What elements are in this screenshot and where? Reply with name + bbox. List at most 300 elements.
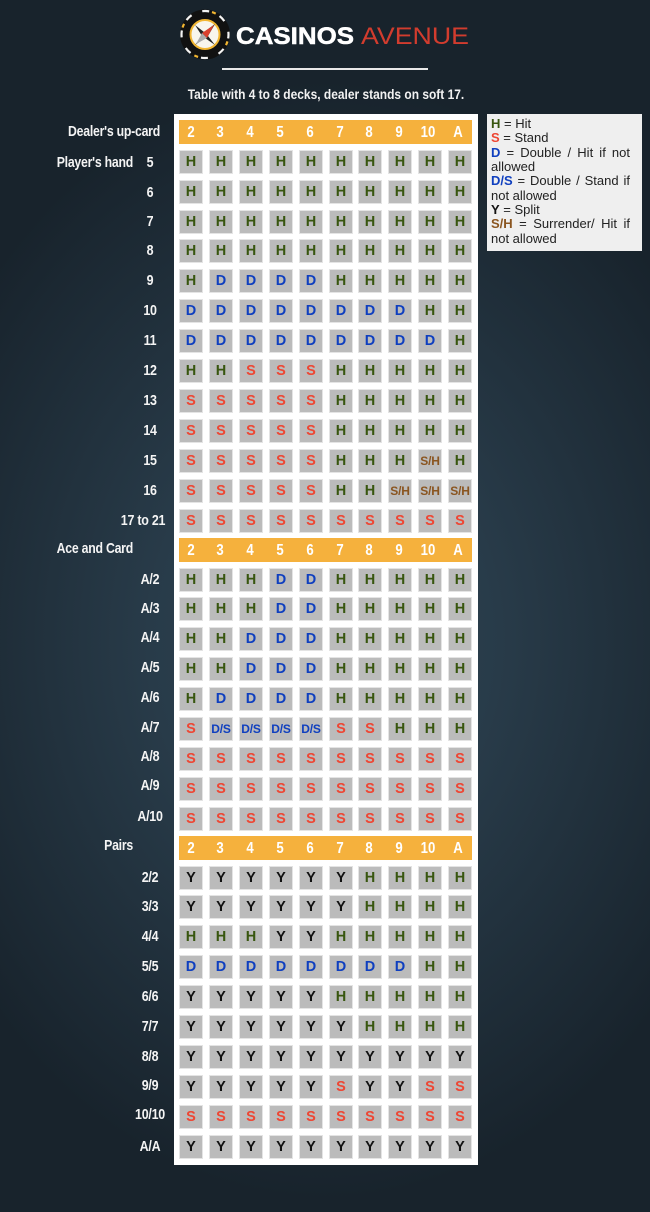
row: A/9: S	[186, 781, 196, 797]
row: 6: H	[395, 184, 405, 200]
row: 5/5: D	[216, 959, 226, 975]
row: 14: H	[455, 423, 465, 439]
row: A/6: H	[455, 691, 465, 707]
row: 10: H	[425, 303, 435, 319]
row: 14: S	[186, 423, 196, 439]
row: 7: H	[276, 214, 286, 230]
row: 7/7: H	[455, 1019, 465, 1035]
row: A/5: H	[365, 661, 375, 677]
row: A/3: H	[216, 601, 226, 617]
row: A/A: Y	[395, 1139, 405, 1155]
row: 6: H	[306, 184, 316, 200]
row: 5: H	[365, 154, 375, 170]
row: 16: 16	[143, 482, 157, 499]
row: 9: D	[276, 273, 286, 289]
row: 8: H	[216, 243, 226, 259]
row: 7/7: H	[365, 1019, 375, 1035]
row: 7/7: Y	[186, 1019, 196, 1035]
row: A/3: H	[425, 601, 435, 617]
row: 10: D	[365, 303, 375, 319]
row: 3/3: Y	[276, 899, 286, 915]
row: 11: D	[276, 333, 286, 349]
row: 9: H	[455, 273, 465, 289]
row: 5: H	[306, 154, 316, 170]
legend panel	[487, 114, 642, 251]
row: 4/4: H	[336, 929, 346, 945]
row: 8: H	[336, 243, 346, 259]
row: 16	[143, 479, 472, 503]
header row: pairs: 10	[421, 840, 435, 857]
row: 9/9: Y	[365, 1079, 375, 1095]
row: 17 to 21: S	[306, 513, 316, 529]
row: 5: H	[395, 154, 405, 170]
row: 5/5: D	[395, 959, 405, 975]
header row: ace and card: 5	[276, 542, 284, 559]
row: A/9: S	[216, 781, 226, 797]
heading: player's hand: Player's hand	[57, 154, 133, 171]
row: A/9: S	[336, 781, 346, 797]
header row: dealer cards: 8	[365, 124, 373, 141]
row: 10/10: S	[306, 1109, 316, 1125]
row: A/4: H	[336, 631, 346, 647]
row: 7: 7	[147, 213, 153, 230]
row: 7: H	[365, 214, 375, 230]
row: 12: H	[186, 363, 196, 379]
row: A/8: S	[455, 751, 465, 767]
row: 15: S/H	[420, 454, 440, 468]
row: 15: H	[395, 453, 405, 469]
header row: pairs: 8	[365, 840, 373, 857]
row: A/10: S	[455, 811, 465, 827]
row: 6/6: H	[425, 989, 435, 1005]
row: 9: H	[395, 273, 405, 289]
row: 16: H	[336, 483, 346, 499]
row: 12: H	[216, 363, 226, 379]
row: A/5	[140, 657, 472, 681]
row: A/10: S	[365, 811, 375, 827]
row: 5: H	[276, 154, 286, 170]
row: A/4: H	[365, 631, 375, 647]
header row: ace and card: 2	[187, 542, 195, 559]
header row: dealer cards: A	[453, 124, 463, 141]
row: 12: S	[246, 363, 256, 379]
row: 17 to 21: S	[336, 513, 346, 529]
row: 12	[143, 359, 472, 383]
row: 10: D	[395, 303, 405, 319]
header row: pairs: 2	[187, 840, 195, 857]
row: 2/2: H	[455, 870, 465, 886]
row: A/4: A/4	[141, 629, 159, 646]
row: 5	[147, 150, 472, 174]
logo	[180, 10, 469, 60]
row: 6: H	[186, 184, 196, 200]
row: A/6: A/6	[141, 689, 159, 706]
row: 8/8: Y	[246, 1049, 256, 1065]
row: 5: H	[186, 154, 196, 170]
row: 14: 14	[143, 422, 157, 439]
row: A/6: D	[306, 691, 316, 707]
row: 8: H	[395, 243, 405, 259]
row: 17 to 21: S	[425, 513, 435, 529]
row: A/10: S	[425, 811, 435, 827]
row: 17 to 21: S	[186, 513, 196, 529]
row: 15	[143, 449, 472, 473]
header row: dealer cards: 5	[276, 124, 284, 141]
row: 7/7: Y	[336, 1019, 346, 1035]
row: 11: D	[186, 333, 196, 349]
row: 4/4	[142, 925, 472, 949]
row: 6: H	[276, 184, 286, 200]
row: 10/10: S	[425, 1109, 435, 1125]
subtitle: Table with 4 to 8 decks, dealer stands on soft 17.	[188, 86, 464, 102]
row: 6/6: Y	[186, 989, 196, 1005]
row: 11: D	[306, 333, 316, 349]
header row: pairs: 3	[216, 840, 224, 857]
row: A/10: A/10	[137, 808, 163, 825]
row: A/8: S	[425, 751, 435, 767]
row: A/10: S	[186, 811, 196, 827]
row: 4/4: H	[216, 929, 226, 945]
row: 11: D	[216, 333, 226, 349]
row: 7/7: 7/7	[142, 1018, 158, 1035]
row: A/10: S	[306, 811, 316, 827]
row: 10/10: S	[365, 1109, 375, 1125]
row: A/3: A/3	[141, 600, 159, 617]
row: A/5: H	[216, 661, 226, 677]
row: A/7: S	[186, 721, 196, 737]
row: 13: 13	[143, 392, 157, 409]
row: 11: D	[425, 333, 435, 349]
row: A/4: H	[186, 631, 196, 647]
row: A/4: D	[246, 631, 256, 647]
row: 16: S/H	[420, 484, 440, 498]
row: A/5: H	[186, 661, 196, 677]
row: A/3: H	[186, 601, 196, 617]
row: 10: D	[306, 303, 316, 319]
row: A/A: Y	[216, 1139, 226, 1155]
row: A/5: H	[336, 661, 346, 677]
header row: dealer cards: 6	[306, 124, 314, 141]
row: A/2	[140, 568, 472, 592]
row: A/7: D/S	[301, 722, 321, 736]
row: A/5: H	[425, 661, 435, 677]
wordmark	[236, 23, 469, 50]
row: 2/2	[142, 866, 472, 890]
row: A/8: S	[246, 751, 256, 767]
header row: dealer cards: 3	[216, 124, 224, 141]
row: 5/5: H	[425, 959, 435, 975]
row: 10: D	[276, 303, 286, 319]
row: 12: S	[306, 363, 316, 379]
row: 5/5	[142, 955, 472, 979]
row: A/A: Y	[336, 1139, 346, 1155]
row: A/2: H	[186, 572, 196, 588]
row: 12: H	[425, 363, 435, 379]
row: 9/9: Y	[216, 1079, 226, 1095]
row: 10: H	[455, 303, 465, 319]
row: 10/10: S	[336, 1109, 346, 1125]
row: A/2: H	[395, 572, 405, 588]
row: 8/8: Y	[455, 1049, 465, 1065]
row: A/9: S	[246, 781, 256, 797]
row: A/7: D/S	[241, 722, 261, 736]
row: 4/4: H	[425, 929, 435, 945]
row: 7/7	[142, 1015, 472, 1039]
row: A/6: H	[365, 691, 375, 707]
row: A/A: Y	[425, 1139, 435, 1155]
row: 9/9: S	[336, 1079, 346, 1095]
row: 15: S	[276, 453, 286, 469]
header row: pairs: 4	[246, 840, 254, 857]
row: 16: S	[216, 483, 226, 499]
row: 15: H	[365, 453, 375, 469]
row: 5: H	[216, 154, 226, 170]
row: A/2: H	[246, 572, 256, 588]
row: A/8	[140, 747, 472, 771]
heading: pairs: Pairs	[104, 837, 133, 854]
row: 9/9: S	[455, 1079, 465, 1095]
header row: ace and card: 7	[336, 542, 344, 559]
row: 4/4: H	[455, 929, 465, 945]
row: 5: H	[455, 154, 465, 170]
row: 5: H	[246, 154, 256, 170]
row: 5/5: D	[306, 959, 316, 975]
row: A/2: H	[216, 572, 226, 588]
legend panel: allowed	[491, 159, 535, 174]
header row: dealer cards: 10	[421, 124, 435, 141]
row: 2/2: H	[365, 870, 375, 886]
row: 16: S/H	[450, 484, 470, 498]
row: 13: H	[455, 393, 465, 409]
row: 7/7: H	[395, 1019, 405, 1035]
row: 3/3: H	[425, 899, 435, 915]
row: 17 to 21: S	[246, 513, 256, 529]
row: 2/2: Y	[276, 870, 286, 886]
heading: dealer's up-card: Dealer's up-card	[68, 123, 160, 140]
row: 7/7: Y	[246, 1019, 256, 1035]
row: A/9: S	[365, 781, 375, 797]
row: 2/2: H	[395, 870, 405, 886]
panel: strategy table	[174, 114, 478, 1165]
row: 2/2: 2/2	[142, 869, 158, 886]
legend panel: not allowed	[491, 188, 557, 203]
row: A/4: D	[306, 631, 316, 647]
row: A/6: D	[276, 691, 286, 707]
header row: pairs: 7	[336, 840, 344, 857]
row: 9/9: Y	[246, 1079, 256, 1095]
header row: ace and card: 6	[306, 542, 314, 559]
header row: pairs: 9	[395, 840, 403, 857]
row: 8: H	[365, 243, 375, 259]
row: 8: H	[306, 243, 316, 259]
header row: ace and card: A	[453, 542, 463, 559]
row: 3/3: H	[395, 899, 405, 915]
row: 13: S	[306, 393, 316, 409]
row: A/8: S	[276, 751, 286, 767]
row: 2/2: Y	[246, 870, 256, 886]
row: 6: H	[246, 184, 256, 200]
row: 7: H	[395, 214, 405, 230]
row: A/A: Y	[246, 1139, 256, 1155]
row: 9/9: Y	[306, 1079, 316, 1095]
row: A/7: D/S	[271, 722, 291, 736]
row: 9/9: S	[425, 1079, 435, 1095]
row: 3/3: Y	[306, 899, 316, 915]
row: 10/10: 10/10	[135, 1106, 165, 1123]
row: A/7: S	[336, 721, 346, 737]
row: 10/10	[135, 1105, 472, 1129]
row: 7/7: Y	[306, 1019, 316, 1035]
row: 6/6: Y	[276, 989, 286, 1005]
row: 12: 12	[143, 362, 157, 379]
row: 11: H	[455, 333, 465, 349]
legend panel: Y = Split	[491, 202, 540, 217]
row: 8/8: 8/8	[142, 1048, 158, 1065]
row: 13: H	[336, 393, 346, 409]
row: 5/5: D	[365, 959, 375, 975]
row: 6/6: Y	[216, 989, 226, 1005]
row: 13	[143, 389, 472, 413]
row: A/3: H	[455, 601, 465, 617]
row: A/7: H	[425, 721, 435, 737]
row: A/4: H	[395, 631, 405, 647]
row: 13: S	[216, 393, 226, 409]
row: A/A: Y	[306, 1139, 316, 1155]
row: 2/2: Y	[336, 870, 346, 886]
header row: ace and card	[179, 538, 472, 562]
row: 14: H	[425, 423, 435, 439]
row: A/4	[140, 627, 472, 651]
row: 6/6: H	[395, 989, 405, 1005]
row: 6/6: 6/6	[142, 988, 158, 1005]
row: 11: D	[336, 333, 346, 349]
row: 10/10: S	[186, 1109, 196, 1125]
row: 16: S	[276, 483, 286, 499]
row: 7	[147, 210, 472, 234]
legend panel: S = Stand	[491, 130, 548, 145]
header row: pairs: A	[453, 840, 463, 857]
row: 17 to 21: S	[455, 513, 465, 529]
row: 13: S	[186, 393, 196, 409]
row: A/A: Y	[455, 1139, 465, 1155]
row: 17 to 21: 17 to 21	[121, 512, 165, 529]
row: A/10: S	[246, 811, 256, 827]
header row: pairs: 6	[306, 840, 314, 857]
row: 7: H	[455, 214, 465, 230]
header row: dealer cards: 2	[187, 124, 195, 141]
row: A/5: H	[395, 661, 405, 677]
row: A/5: D	[246, 661, 256, 677]
row: A/5: D	[276, 661, 286, 677]
header row: pairs	[179, 836, 472, 860]
row: 5/5: H	[455, 959, 465, 975]
row: A/10: S	[216, 811, 226, 827]
row: 5/5: D	[336, 959, 346, 975]
row: 7: H	[246, 214, 256, 230]
row: A/3: H	[365, 601, 375, 617]
header row: ace and card: 3	[216, 542, 224, 559]
row: 8/8: Y	[425, 1049, 435, 1065]
heading: ace and card: Ace and Card	[57, 540, 133, 557]
row: 5/5: D	[246, 959, 256, 975]
row: 3/3: H	[455, 899, 465, 915]
row: A/3: H	[246, 601, 256, 617]
row: 10: 10	[143, 302, 157, 319]
row: A/9: S	[395, 781, 405, 797]
row: A/7: D/S	[211, 722, 231, 736]
row: A/A: A/A	[140, 1138, 160, 1155]
row: A/A: Y	[276, 1139, 286, 1155]
row: 2/2: Y	[186, 870, 196, 886]
row: 4/4: H	[395, 929, 405, 945]
row: A/6	[140, 687, 472, 711]
row: 8: H	[455, 243, 465, 259]
row: A/9: S	[455, 781, 465, 797]
row: 9: 9	[147, 272, 153, 289]
row: 5: H	[336, 154, 346, 170]
row: 16: S	[246, 483, 256, 499]
row: 4/4: Y	[276, 929, 286, 945]
row: 15: S	[306, 453, 316, 469]
header row: pairs: 5	[276, 840, 284, 857]
row: 16: S	[306, 483, 316, 499]
row: A/2: A/2	[141, 571, 159, 588]
row: 6/6: H	[336, 989, 346, 1005]
row: 3/3: Y	[186, 899, 196, 915]
row: 4/4: Y	[306, 929, 316, 945]
row: 10: D	[216, 303, 226, 319]
row: 14: H	[336, 423, 346, 439]
row: A/2: D	[306, 572, 316, 588]
row: 2/2: H	[425, 870, 435, 886]
row: 7: H	[336, 214, 346, 230]
row: 15: S	[246, 453, 256, 469]
row: 14: S	[306, 423, 316, 439]
icon: casino chip compass	[180, 10, 230, 60]
row: A/4: H	[425, 631, 435, 647]
legend panel: D = Double / Hit if not	[491, 145, 630, 160]
row: 4/4: H	[365, 929, 375, 945]
row: A/7	[140, 717, 472, 741]
row: A/5: H	[455, 661, 465, 677]
legend panel: not allowed	[491, 231, 557, 246]
row: A/3: H	[336, 601, 346, 617]
row: 3/3: Y	[336, 899, 346, 915]
wordmark: AVENUE	[361, 23, 469, 50]
row: 10: D	[336, 303, 346, 319]
row: 6/6: Y	[246, 989, 256, 1005]
legend panel: D/S = Double / Stand if	[491, 173, 630, 188]
row: 15: S	[186, 453, 196, 469]
row: 12: S	[276, 363, 286, 379]
row: 10/10: S	[395, 1109, 405, 1125]
row: A/3	[140, 597, 472, 621]
row: 11: 11	[144, 332, 156, 349]
row: 6/6	[142, 985, 472, 1009]
row: A/2: H	[455, 572, 465, 588]
row: 12: H	[395, 363, 405, 379]
row: A/7: H	[455, 721, 465, 737]
row: 9: H	[425, 273, 435, 289]
row: 9: D	[306, 273, 316, 289]
row: 9: H	[186, 273, 196, 289]
row: 10: D	[186, 303, 196, 319]
row: 8: H	[246, 243, 256, 259]
row: 17 to 21: S	[276, 513, 286, 529]
row: 3/3: Y	[246, 899, 256, 915]
row: A/2: H	[425, 572, 435, 588]
row: 10	[143, 299, 472, 323]
